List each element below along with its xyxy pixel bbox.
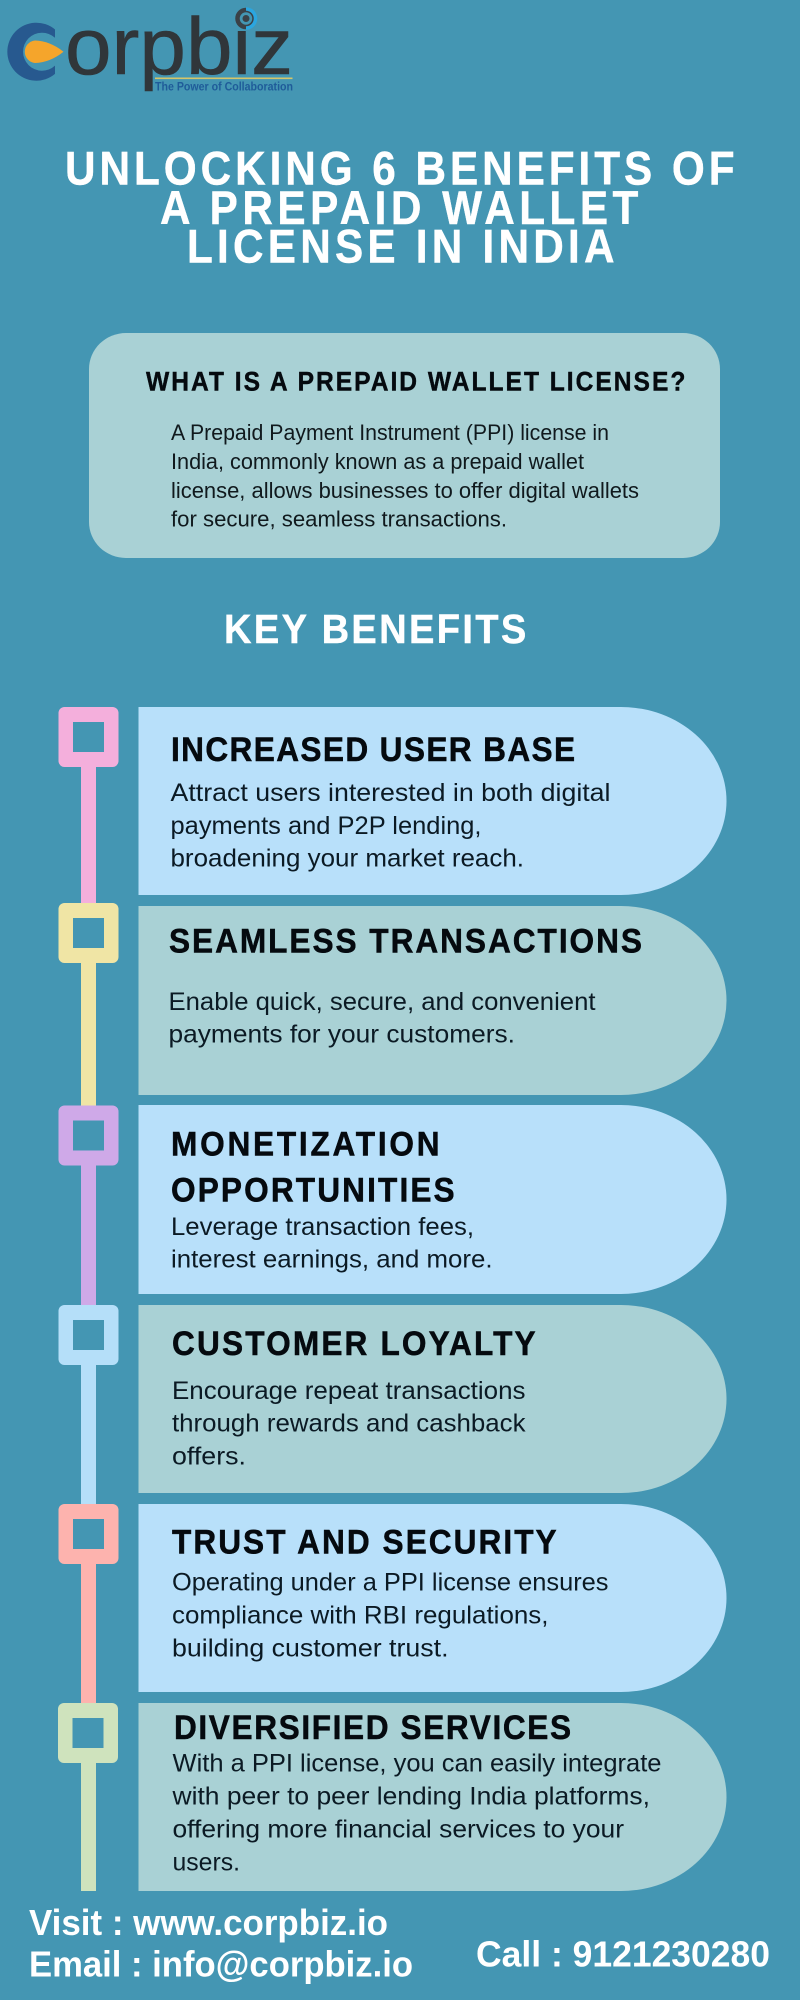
body text: compliance with RBI regulations,	[172, 1602, 548, 1630]
body text: Leverage transaction fees,	[171, 1213, 474, 1241]
logo: Corpbiz	[7, 2, 293, 94]
intro panel background	[89, 333, 720, 558]
body text	[171, 1750, 662, 1876]
logo ring over the i	[234, 6, 258, 31]
logo underline	[155, 78, 292, 79]
heading	[171, 1124, 455, 1209]
step 1 marker	[58, 707, 118, 910]
body text	[172, 1377, 526, 1470]
heading: DIVERSIFIED SERVICES	[174, 1708, 571, 1746]
body text	[170, 779, 610, 872]
heading: key benefits: KEY BENEFITS	[224, 607, 526, 652]
body text: payments and P2P lending,	[170, 812, 482, 840]
panel: diversified services	[138, 1703, 727, 1891]
email: Email : info@corpbiz.io	[29, 1944, 413, 1984]
body text	[168, 988, 596, 1048]
step 2 marker	[58, 903, 118, 1110]
logo tagline: The Power of Collaboration	[155, 82, 293, 94]
intro heading: WHAT IS A PREPAID WALLET LICENSE?	[146, 368, 685, 397]
body text: offering more financial services to your	[172, 1816, 624, 1844]
footer: contact details	[29, 1902, 770, 1984]
body text: Operating under a PPI license ensures	[172, 1568, 608, 1596]
intro text: A Prepaid Payment Instrument (PPI) license in	[171, 420, 609, 445]
body text: interest earnings, and more.	[171, 1246, 492, 1274]
body text	[171, 1213, 492, 1274]
intro text	[171, 420, 639, 532]
title: A PREPAID WALLET	[160, 183, 638, 235]
step 4 marker	[58, 1305, 118, 1510]
step 6 marker	[58, 1703, 118, 1891]
intro text: license, allows businesses to offer digital wallets	[171, 478, 639, 503]
body text: payments for your customers.	[168, 1020, 515, 1048]
timeline connector	[58, 707, 118, 1891]
body text: Encourage repeat transactions	[172, 1377, 526, 1405]
intro text: for secure, seamless transactions.	[171, 506, 507, 532]
logo icon: blue C with orange drop	[7, 23, 63, 81]
body text: offers.	[172, 1442, 246, 1470]
step 3 marker	[58, 1106, 118, 1310]
heading: SEAMLESS TRANSACTIONS	[169, 921, 642, 960]
title: UNLOCKING 6 BENEFITS OF	[65, 144, 735, 195]
heading: TRUST AND SECURITY	[172, 1522, 557, 1561]
panel: increased user base	[138, 707, 727, 895]
heading: CUSTOMER LOYALTY	[172, 1324, 536, 1362]
intro text: India, commonly known as a prepaid wallet	[171, 449, 585, 474]
title	[65, 144, 735, 273]
step 5 marker	[58, 1504, 118, 1710]
body text: through rewards and cashback	[172, 1410, 526, 1438]
body text: users.	[172, 1848, 240, 1876]
body text: building customer trust.	[172, 1634, 448, 1662]
body text: Attract users interested in both digital	[170, 779, 610, 807]
panel: trust and security	[138, 1504, 727, 1692]
heading: INCREASED USER BASE	[171, 730, 575, 768]
panel: customer loyalty	[138, 1305, 727, 1493]
body text: Enable quick, secure, and convenient	[168, 988, 596, 1016]
panel: what is a prepaid wallet license	[89, 333, 720, 558]
website: Visit : www.corpbiz.io	[29, 1902, 388, 1943]
panel: monetization opportunities	[138, 1105, 727, 1294]
body text: with peer to peer lending India platforms,	[171, 1782, 650, 1810]
title: LICENSE IN INDIA	[187, 222, 615, 273]
body text: broadening your market reach.	[170, 844, 524, 872]
phone: Call : 9121230280	[476, 1934, 770, 1974]
heading: OPPORTUNITIES	[171, 1170, 455, 1209]
panel: seamless transactions	[138, 906, 727, 1095]
body text: With a PPI license, you can easily integrate	[172, 1750, 662, 1778]
logo wordmark: orpbiz	[65, 2, 293, 92]
body text	[172, 1568, 608, 1662]
heading: MONETIZATION	[171, 1124, 440, 1163]
